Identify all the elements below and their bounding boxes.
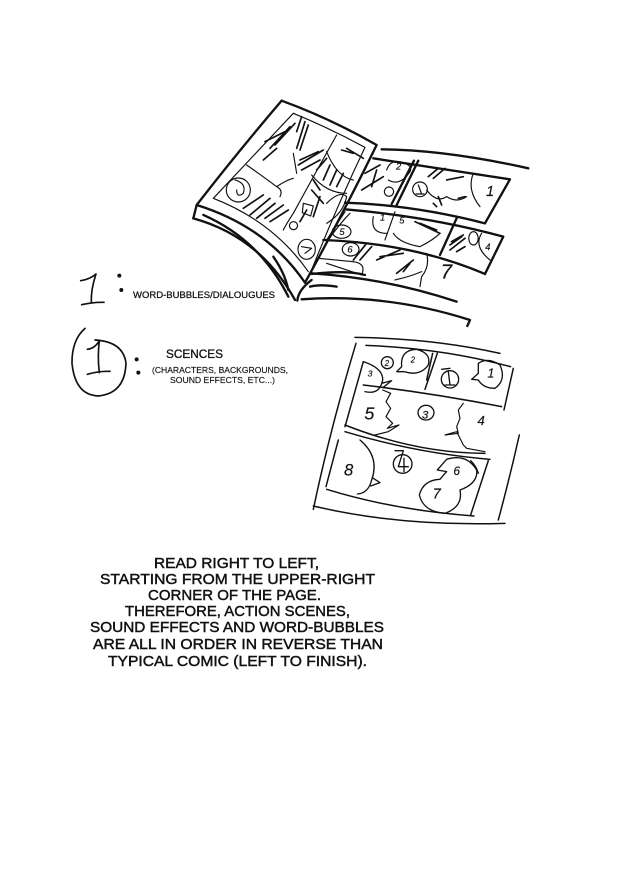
panel numbers: 6 — [453, 464, 460, 478]
symbol: plain numeral 1 and colon — [81, 274, 123, 305]
panel numbers: 8 — [344, 460, 354, 479]
right page hatching — [353, 165, 465, 273]
panel numbers: 3 — [368, 369, 373, 379]
right page numbers: 6 — [347, 245, 353, 255]
explanation text block — [90, 555, 384, 670]
legend text: scenes: SCENCES — [166, 347, 223, 361]
panel numbers: 3 — [422, 409, 429, 421]
right page numbers: 5 — [399, 215, 405, 225]
explanation text block: STARTING FROM THE UPPER-RIGHT — [100, 571, 375, 588]
explanation text block: ARE ALL IN ORDER IN REVERSE THAN — [93, 636, 383, 653]
explanation text block: READ RIGHT TO LEFT, — [154, 555, 319, 572]
left page hatching — [243, 117, 363, 222]
symbol: circled numeral 1 and colon — [72, 328, 140, 396]
panel numbers: 7 — [433, 486, 442, 502]
panel numbers: 4 — [477, 413, 485, 428]
panel numbers: 2 — [410, 355, 416, 364]
panel numbers: 5 — [364, 403, 375, 423]
page outline — [313, 337, 519, 524]
right page numbers: 1 — [486, 184, 494, 200]
right page thin details — [318, 161, 490, 287]
explanation text block: TYPICAL COMIC (LEFT TO FINISH). — [108, 653, 367, 670]
legend text: word bubbles: WORD-BUBBLES/DIALOUGUES — [133, 290, 275, 300]
panel numbers: 2 — [384, 359, 390, 368]
right page numbers — [339, 161, 494, 283]
diagram: reading order page — [313, 337, 519, 524]
right page panels — [312, 158, 510, 275]
legend text: scenes: (CHARACTERS, BACKGROUNDS, — [152, 365, 288, 375]
legend text: scenes: SOUND EFFECTS, ETC...) — [170, 375, 275, 385]
panel numbers: 1 — [487, 366, 494, 380]
right page numbers: 7 — [441, 260, 454, 283]
jagged dividers — [375, 390, 485, 452]
book outline — [193, 101, 528, 326]
right page numbers: 4 — [485, 242, 491, 252]
speech bubbles — [357, 349, 502, 513]
explanation text block: THEREFORE, ACTION SCENES, — [125, 603, 350, 620]
explanation text block: SOUND EFFECTS AND WORD-BUBBLES — [90, 619, 384, 636]
right page numbers: 5 — [339, 227, 345, 237]
right page numbers: 2 — [395, 161, 402, 171]
left page panels — [213, 113, 365, 272]
panel numbers — [344, 355, 494, 502]
right page numbers: 1 — [380, 213, 385, 223]
explanation text block: CORNER OF THE PAGE. — [148, 587, 321, 604]
illustration: open manga book — [193, 101, 528, 326]
legend text: scenes — [152, 347, 288, 385]
